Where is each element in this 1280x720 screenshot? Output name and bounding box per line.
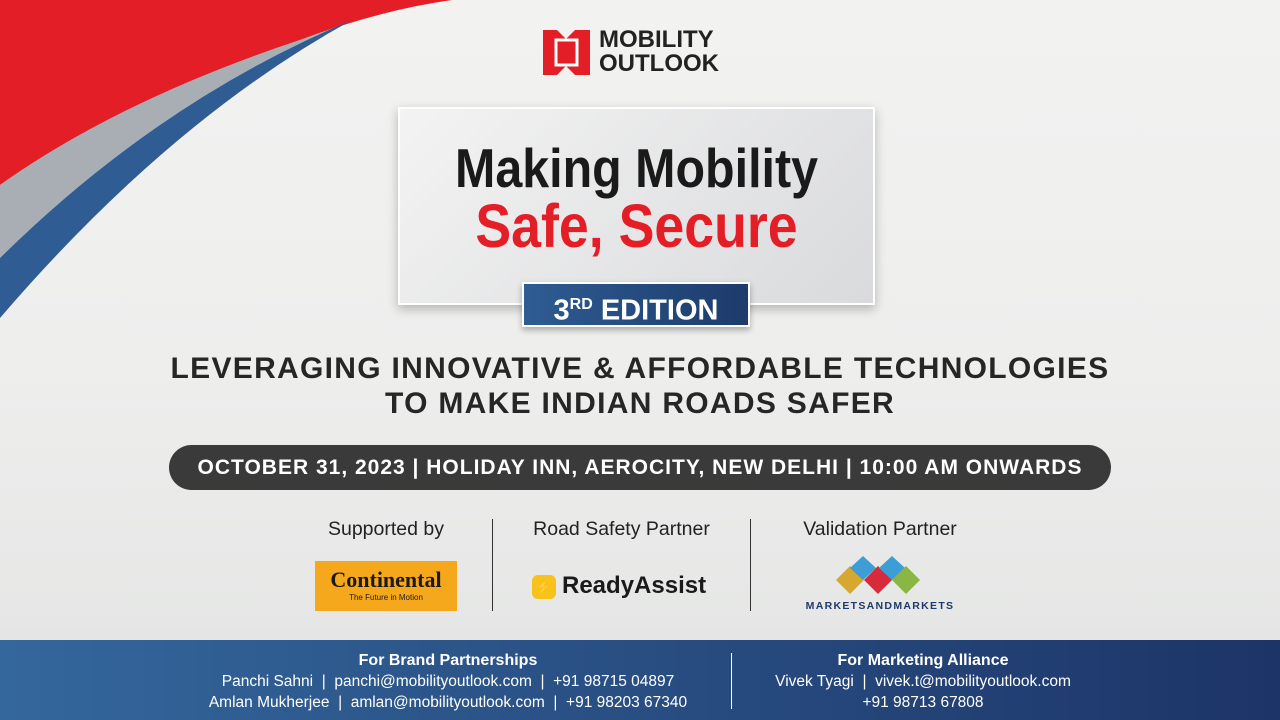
- footer: [0, 640, 1280, 720]
- continental logo: The Future in Motion: [349, 593, 423, 602]
- logo: OUTLOOK: [599, 50, 719, 77]
- marketing alliance contacts: Vivek Tyagi | vivek.t@mobilityoutlook.com: [775, 673, 1071, 690]
- continental logo: Continental: [330, 567, 442, 592]
- marketing alliance contacts: [775, 652, 1071, 711]
- brand partnerships contacts: For Brand Partnerships: [359, 652, 537, 669]
- edition badge: 3RD EDITION: [554, 295, 718, 327]
- partner: validation: [803, 518, 957, 612]
- brand partnerships contacts: [208, 652, 687, 711]
- readyassist logo: ReadyAssist: [562, 572, 706, 599]
- subtitle: TO MAKE INDIAN ROADS SAFER: [385, 387, 895, 420]
- brand partnerships contacts: Amlan Mukherjee | amlan@mobilityoutlook.com | +91 98203 67340: [209, 694, 687, 711]
- title: [455, 137, 818, 260]
- event details pill: [169, 445, 1111, 490]
- partner: road safety: [532, 518, 710, 599]
- partner: validation: MARKETSANDMARKETS: [806, 600, 954, 612]
- continental logo: [315, 561, 457, 611]
- partner: supported by: [315, 518, 457, 611]
- partner: validation: Validation Partner: [803, 518, 957, 540]
- logo: MOBILITY: [599, 26, 714, 53]
- brand partnerships contacts: Panchi Sahni | panchi@mobilityoutlook.com | +91 98715 04897: [222, 673, 674, 690]
- readyassist logo: ⚡: [535, 579, 553, 595]
- marketing alliance contacts: For Marketing Alliance: [838, 652, 1008, 669]
- event details pill: OCTOBER 31, 2023 | HOLIDAY INN, AEROCITY, NEW DELHI | 10:00 AM ONWARDS: [198, 456, 1082, 479]
- marketing alliance contacts: +91 98713 67808: [862, 694, 984, 711]
- decorative swoosh: [0, 0, 452, 318]
- title box: [398, 107, 875, 305]
- subtitle: [171, 352, 1109, 420]
- title: Safe, Secure: [475, 192, 798, 260]
- partner: supported by: Supported by: [328, 518, 444, 540]
- title: Making Mobility: [455, 137, 818, 199]
- logo: [543, 26, 719, 77]
- subtitle: LEVERAGING INNOVATIVE & AFFORDABLE TECHNOLOGIES: [171, 352, 1109, 385]
- partner: road safety: Road Safety Partner: [533, 518, 710, 540]
- marketsandmarkets logo: [836, 556, 920, 594]
- edition badge: [522, 282, 750, 327]
